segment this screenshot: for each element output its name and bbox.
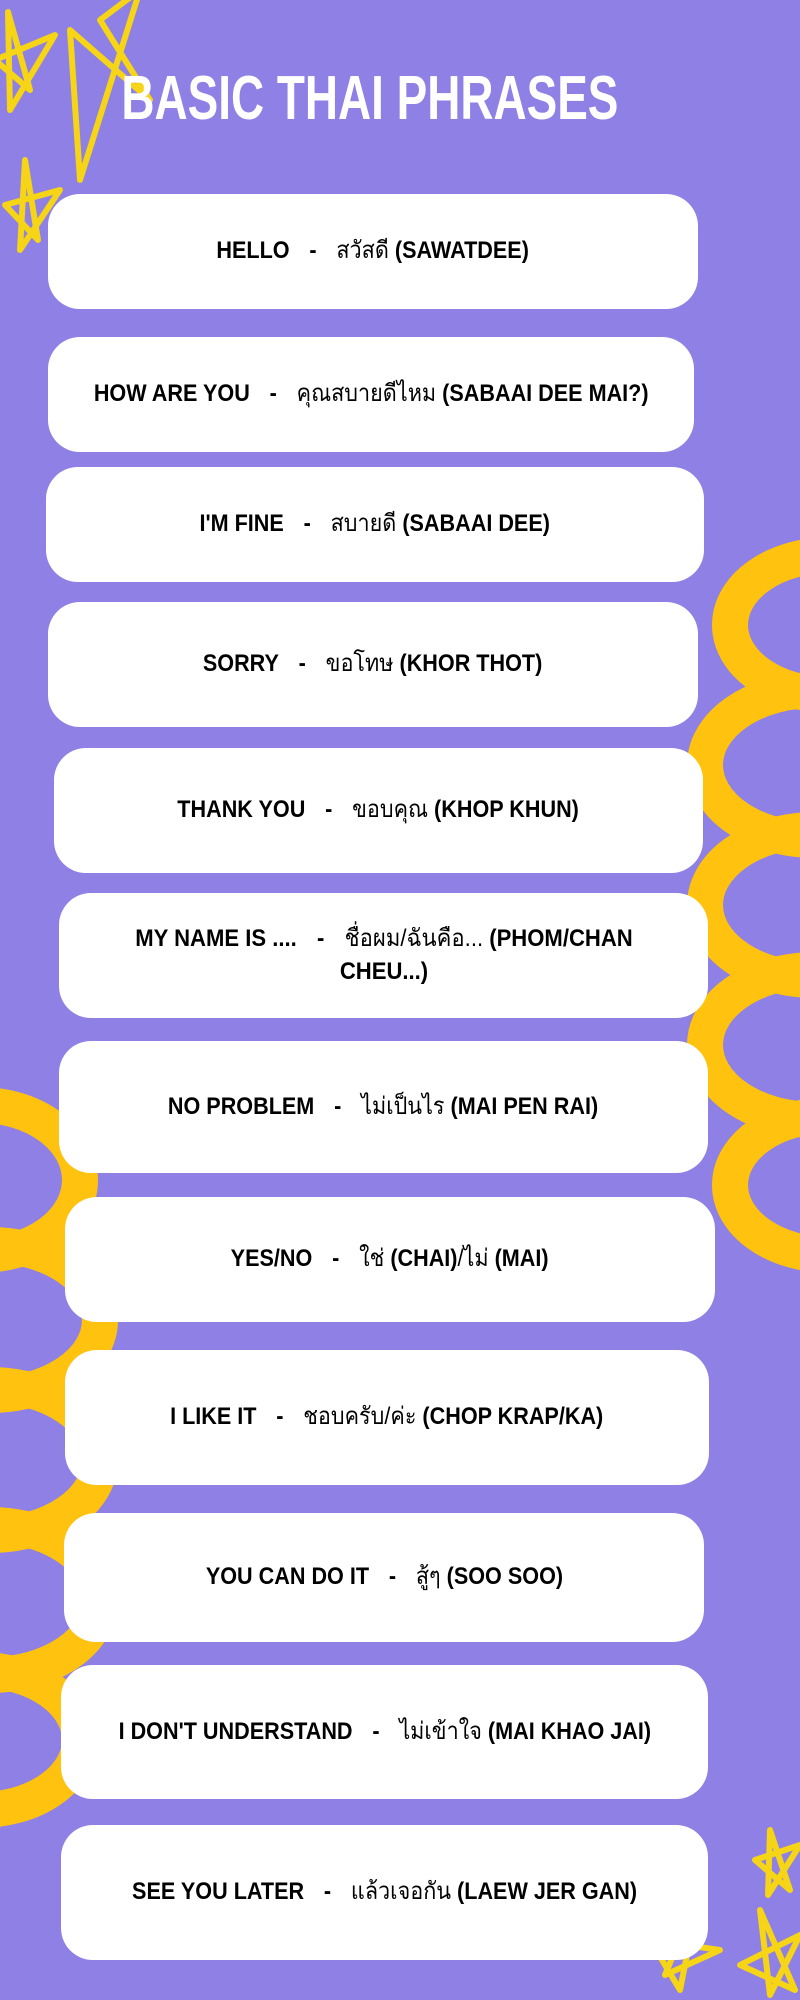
card: sorry bbox=[48, 602, 698, 727]
card: sorry: - bbox=[299, 650, 306, 677]
card: see you later: - bbox=[324, 1878, 331, 1905]
card: sorry: SORRY ขอโทษ (KHOR THOT) bbox=[203, 650, 543, 677]
card: I don't understand: - bbox=[372, 1718, 379, 1745]
card: no problem bbox=[59, 1041, 708, 1173]
card: hello: - bbox=[310, 237, 317, 264]
card: you can do it bbox=[64, 1513, 704, 1642]
card: yes/no: YES/NO ใช่ (CHAI)/ไม่ (MAI) bbox=[231, 1245, 549, 1272]
card: see you later: SEE YOU LATER แล้วเจอกัน (LAEW JER GAN) bbox=[132, 1878, 637, 1905]
card: my name is bbox=[59, 893, 708, 1018]
card: you can do it: - bbox=[388, 1563, 396, 1590]
card: hello bbox=[48, 194, 698, 309]
card: yes/no bbox=[65, 1197, 715, 1322]
card: I like it: I LIKE IT ชอบครับ/ค่ะ (CHOP KRAP/KA) bbox=[170, 1403, 604, 1430]
card: I like it: - bbox=[277, 1403, 284, 1430]
card: I like it bbox=[65, 1350, 709, 1485]
card: I'm fine bbox=[46, 467, 704, 582]
card: thank you: - bbox=[326, 796, 333, 823]
card: how are you: HOW ARE YOU คุณสบายดีไหม (SABAAI DEE MAI?) bbox=[94, 380, 648, 407]
card: yes/no: - bbox=[332, 1245, 340, 1272]
card: thank you: THANK YOU ขอบคุณ (KHOP KHUN) bbox=[178, 796, 579, 823]
card: no problem: - bbox=[335, 1093, 342, 1120]
title: BASIC THAI PHRASES bbox=[121, 64, 619, 133]
card: my name is: - bbox=[317, 925, 324, 952]
card: how are you: - bbox=[269, 380, 277, 407]
card: my name is: MY NAME IS .... ชื่อผม/ฉันคือ... (PHOM/CHAN CHEU...) bbox=[135, 925, 632, 984]
card: I don't understand bbox=[61, 1665, 708, 1799]
card: thank you bbox=[54, 748, 703, 873]
card: hello: HELLO สวัสดี (SAWATDEE) bbox=[217, 237, 529, 264]
card: how are you bbox=[48, 337, 694, 452]
card: see you later bbox=[61, 1825, 708, 1960]
card: I'm fine: I'M FINE สบายดี (SABAAI DEE) bbox=[200, 510, 550, 537]
card: I don't understand: I DON'T UNDERSTAND ไม่เข้าใจ (MAI KHAO JAI) bbox=[118, 1718, 651, 1745]
card: you can do it: YOU CAN DO IT สู้ๆ (SOO SOO) bbox=[205, 1563, 563, 1590]
card: I'm fine: - bbox=[304, 510, 311, 537]
card: no problem: NO PROBLEM ไม่เป็นไร (MAI PEN RAI) bbox=[168, 1093, 599, 1120]
